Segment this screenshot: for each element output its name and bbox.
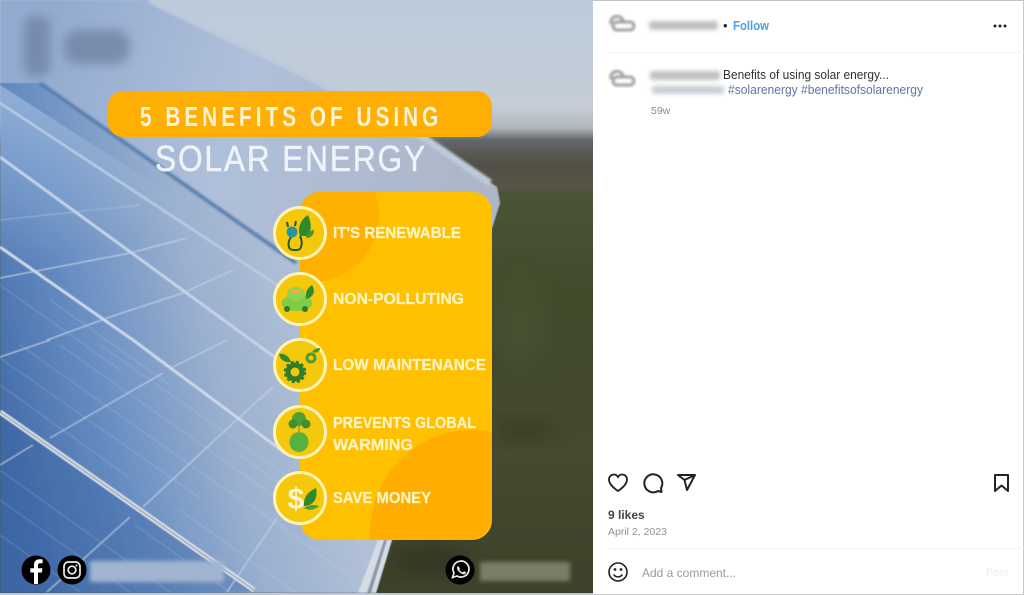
- photo: solar panel background: [0, 0, 593, 593]
- icon: instagram: [58, 556, 86, 584]
- follow link: •: [723, 18, 728, 33]
- blurred logo: [24, 16, 130, 76]
- post header: [611, 16, 1006, 33]
- post header: Follow: [733, 19, 769, 33]
- icon: gears and leaves: [274, 340, 326, 390]
- icon: share: [678, 475, 695, 490]
- label: NON-POLLUTING: [333, 291, 464, 308]
- post sidebar: [593, 0, 1024, 595]
- label: [333, 415, 476, 454]
- caption: [611, 68, 924, 117]
- icon: heart: [609, 474, 627, 491]
- likes: 9 likes: [608, 508, 645, 522]
- label: LOW MAINTENANCE: [333, 357, 486, 374]
- icon: more menu: [994, 24, 1006, 28]
- icon: blurred avatar: [611, 16, 634, 30]
- title banner: 5 BENEFITS OF USING: [140, 102, 438, 133]
- title banner: [108, 91, 492, 137]
- icon: comment: [644, 474, 662, 492]
- icon: dollar and leaf: [274, 472, 326, 524]
- blurred username: [650, 71, 720, 80]
- label: SAVE MONEY: [333, 490, 431, 507]
- item: save money: [274, 472, 431, 524]
- icon: green car: [274, 274, 326, 324]
- blurred username: [649, 21, 718, 30]
- subtitle: SOLAR ENERGY: [155, 139, 425, 179]
- item: low maintenance: [274, 340, 486, 390]
- icon: tree and globe: [274, 406, 326, 458]
- post button: Post: [986, 567, 1008, 579]
- item: non-polluting: [274, 274, 464, 324]
- icon: plug and leaf: [274, 208, 326, 258]
- panel top edge haze: [150, 0, 490, 183]
- comment bar: [609, 563, 1008, 581]
- item: prevents global warming: [274, 406, 476, 458]
- hashtags: #solarenergy #benefitsofsolarenergy: [728, 83, 924, 97]
- label: IT'S RENEWABLE: [333, 225, 461, 242]
- benefits card: [273, 192, 492, 540]
- panel cell lines: [0, 205, 277, 592]
- panel rails: [0, 103, 300, 590]
- time: 59w: [651, 105, 671, 117]
- solar panel: [0, 0, 500, 593]
- sky and field: [0, 0, 593, 593]
- blurred social handles: [90, 561, 570, 582]
- icon: smiley: [609, 563, 627, 581]
- blurred mention: [652, 86, 724, 94]
- icon: dollar and leaf: $: [288, 483, 305, 516]
- icon: facebook: [22, 556, 50, 584]
- icon: blurred avatar: [611, 71, 634, 85]
- item: it's renewable: [274, 208, 461, 258]
- icon: bookmark: [995, 475, 1008, 491]
- photo bottom strip: [0, 593, 593, 595]
- comment placeholder: Add a comment...: [642, 566, 736, 580]
- label: PREVENTS GLOBAL: [333, 415, 476, 432]
- label: WARMING: [333, 437, 413, 454]
- caption text: Benefits of using solar energy...: [723, 68, 889, 82]
- date: April 2, 2023: [608, 526, 667, 538]
- panel streak texture: [0, 284, 284, 592]
- icon: whatsapp: [446, 556, 474, 584]
- panel frame shadow line: [40, 83, 296, 263]
